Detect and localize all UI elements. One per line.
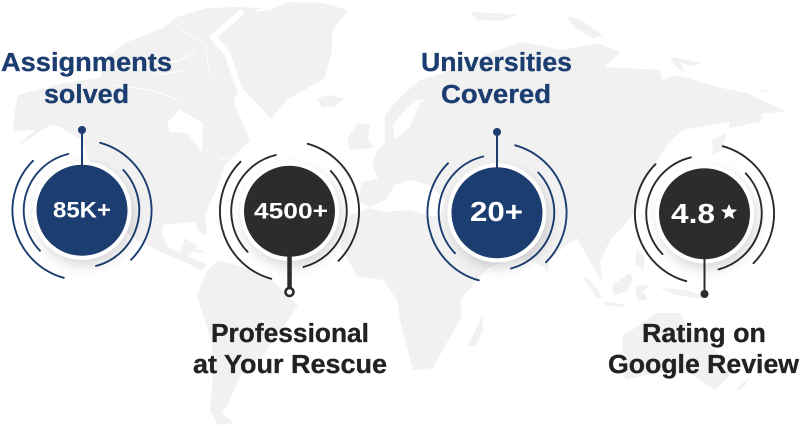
panel: rating on google review (608, 146, 799, 379)
heading: universities covered: Universities (421, 49, 572, 77)
heading: professional at your rescue: Professional (211, 320, 369, 348)
rings (427, 145, 567, 280)
pin connector (286, 255, 294, 296)
badge: 4500+: 4500+ (254, 198, 328, 224)
pin connector (78, 126, 86, 170)
heading: assignments solved: Assignments (1, 49, 172, 77)
badge: 4500+ (240, 162, 339, 261)
badge: 20+: 20+ (470, 196, 523, 227)
heading: rating on google review: Rating on (642, 320, 766, 348)
pin connector (700, 258, 708, 298)
badge: 20+ (448, 163, 546, 262)
panel: universities covered (421, 49, 572, 280)
heading: universities covered (421, 49, 572, 109)
rings (220, 144, 359, 279)
rings (635, 146, 774, 281)
heading: universities covered: Covered (441, 81, 551, 109)
rings (12, 143, 152, 278)
badge: 4.8 star: 4.8 (671, 198, 715, 229)
badge: 85K+: 85K+ (53, 198, 111, 222)
heading: rating on google review (608, 320, 799, 379)
heading: professional at your rescue (193, 320, 387, 379)
heading: assignments solved: solved (44, 81, 129, 109)
panel: assignments solved (1, 49, 172, 278)
badge: 85K+ (32, 161, 132, 260)
pin connector (493, 128, 501, 172)
icon: star (721, 204, 737, 219)
heading: rating on google review: Google Review (608, 351, 799, 379)
panel: professional at your rescue (193, 144, 387, 379)
badge: 4.8 star (655, 164, 754, 263)
heading: assignments solved (1, 49, 172, 109)
heading: professional at your rescue: at Your Rescue (193, 351, 387, 379)
